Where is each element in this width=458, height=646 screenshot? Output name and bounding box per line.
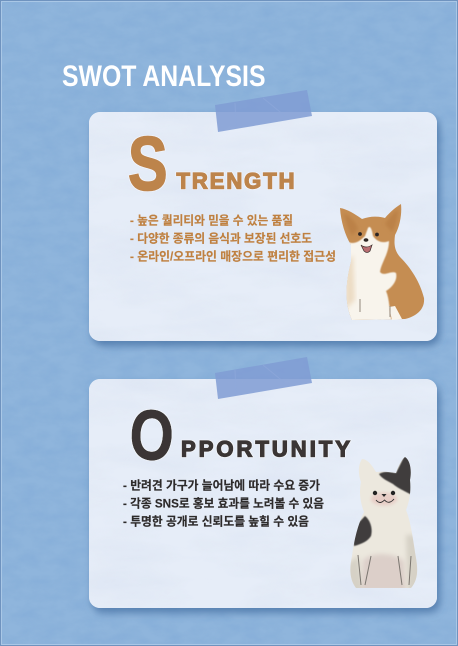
text block: opportunity points — [123, 478, 324, 528]
heading: strength: TRENGTH — [176, 168, 294, 194]
corgi inner ears — [346, 212, 397, 233]
heading: opportunity: PPORTUNITY — [181, 436, 350, 462]
card: strength paper — [89, 112, 437, 341]
panel: strength — [89, 90, 437, 341]
bulldog belly shade — [361, 554, 406, 592]
bulldog black side patch — [352, 516, 372, 546]
text block: strength points: - 온라인/오프라인 매장으로 편리한 접근성 — [130, 248, 336, 264]
text block: strength points — [130, 212, 336, 264]
card: opportunity paper — [89, 379, 437, 608]
title: SWOT ANALYSIS — [62, 60, 266, 93]
paper texture: opportunity — [89, 379, 437, 608]
text block: opportunity points: - 반려견 가구가 늘어남에 따라 수요 증가 — [123, 478, 320, 492]
bulldog black ear patch — [378, 457, 411, 495]
text block: strength points: - 다양한 종류의 음식과 보장된 선호도 — [130, 230, 312, 246]
corgi white chest — [346, 226, 397, 320]
corgi face — [358, 232, 390, 317]
bulldog side shade — [350, 534, 418, 588]
icon: french bulldog — [350, 457, 418, 588]
bulldog face — [358, 491, 411, 585]
heading: strength: S — [128, 122, 168, 207]
tape: opportunity — [215, 357, 312, 399]
corgi coat — [340, 204, 424, 320]
bulldog coat — [350, 458, 412, 588]
corgi belly shade — [345, 255, 355, 310]
panel: opportunity — [89, 357, 437, 608]
heading: opportunity: O — [127, 393, 176, 477]
corgi paws — [389, 306, 402, 320]
heading: opportunity — [127, 393, 350, 477]
heading: strength — [128, 122, 294, 207]
paper texture: strength — [89, 112, 437, 341]
tape: strength — [215, 90, 312, 132]
text block: opportunity points: - 각종 SNS로 홍보 효과를 노려볼 수 있음 — [123, 496, 324, 510]
text block: opportunity points: - 투명한 공개로 신뢰도를 높힐 수 있음 — [123, 514, 309, 528]
text block: strength points: - 높은 퀄리티와 믿을 수 있는 품질 — [130, 212, 293, 228]
icon: corgi — [340, 204, 424, 320]
